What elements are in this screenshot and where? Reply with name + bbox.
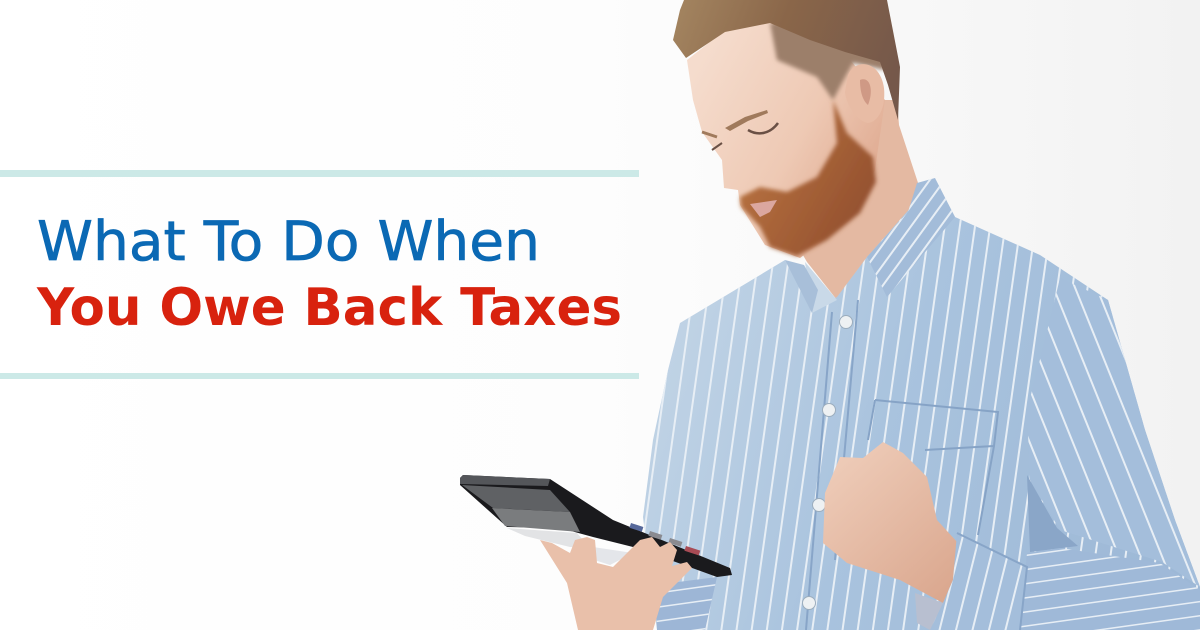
buttons bbox=[802, 281, 893, 610]
undershirt gap bbox=[805, 262, 837, 313]
left sleeve gather bbox=[655, 577, 717, 630]
title line 1: What To Do When bbox=[37, 210, 540, 273]
neck bbox=[800, 100, 922, 300]
shirt pocket bbox=[868, 400, 998, 535]
torso stripes bbox=[643, 180, 1200, 630]
cuff bbox=[915, 533, 1027, 630]
lips bbox=[750, 200, 777, 217]
arm underside shadow bbox=[1027, 475, 1078, 552]
collar bbox=[785, 178, 955, 313]
hair side fade bbox=[770, 20, 890, 100]
title banner bbox=[0, 170, 639, 379]
hair bbox=[673, 0, 900, 120]
ear bbox=[845, 64, 884, 123]
shirt bbox=[643, 180, 1200, 630]
title line 2: You Owe Back Taxes bbox=[36, 278, 622, 338]
eyebrows and eyes bbox=[702, 110, 778, 150]
upper sleeve bbox=[1027, 278, 1200, 587]
beard bbox=[740, 100, 876, 256]
lower sleeve bbox=[1020, 548, 1200, 630]
fist bbox=[823, 442, 958, 603]
hand bbox=[540, 537, 692, 630]
calculator bbox=[460, 475, 732, 577]
placket bbox=[806, 300, 858, 630]
man with calculator bbox=[460, 0, 1200, 630]
head bbox=[687, 22, 885, 258]
